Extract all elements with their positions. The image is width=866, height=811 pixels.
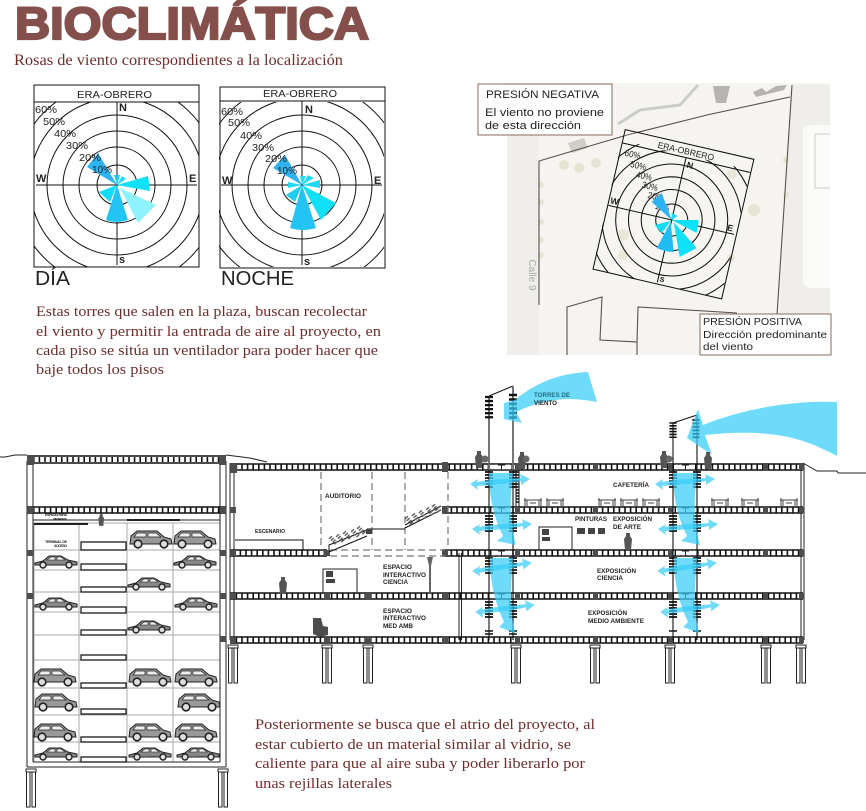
wind rose: noche: 60% <box>221 106 243 118</box>
section labels: CIENCIA <box>597 575 623 582</box>
wind rose: día: 60% <box>35 104 57 116</box>
wind rose: día: 30% <box>66 140 88 152</box>
callout: presión negativa: de esta dirección <box>485 120 581 132</box>
section labels: TORRES DE <box>534 392 571 399</box>
panel: site map: Calle 9 <box>526 259 537 291</box>
wind rose: día: 10% <box>92 164 112 176</box>
callout: presión negativa: El viento no proviene <box>485 107 604 119</box>
wind rose: día <box>34 84 200 268</box>
arrows: flujo descendente torre 2 <box>673 473 700 633</box>
wind rose: noche: 30% <box>252 142 274 154</box>
wind rose: noche: s <box>304 256 310 268</box>
section labels: MEDIO AMBIENTE <box>588 618 645 625</box>
section labels: EXPOSICIÓN <box>613 514 652 523</box>
callout: presión negativa <box>478 84 612 135</box>
callout: presión positiva: PRESIÓN POSITIVA <box>703 315 802 328</box>
section: main building structure <box>228 462 806 683</box>
wind rose: día: 20% <box>79 152 101 164</box>
section: ground line <box>0 455 866 473</box>
section labels: EXPOSICIÓN <box>597 566 636 575</box>
text block: atrio <box>255 717 595 792</box>
section: parking building: TERMINAL DE <box>45 540 68 544</box>
text block: atrio: estar cubierto de un material similar al vidrio, se <box>255 737 571 753</box>
wind rose: día: 50% <box>43 116 65 128</box>
callout: presión positiva <box>700 314 831 355</box>
wind rose: día: s <box>119 254 125 266</box>
section labels: MED AMB <box>383 623 413 630</box>
wind rose: noche: W <box>222 175 233 187</box>
ramp platforms <box>81 542 126 762</box>
people and vegetation <box>279 451 712 637</box>
wind rose: noche: 20% <box>265 153 287 165</box>
wind rose: noche: E <box>374 175 381 187</box>
wind rose: orientada sobre el plano: 40% <box>635 169 653 183</box>
section labels: PINTURAS <box>575 516 608 523</box>
text block: atrio: unas rejillas laterales <box>255 776 392 792</box>
section labels: VIENTO <box>534 400 557 407</box>
wind rose: noche: 40% <box>240 130 262 142</box>
wind rose: noche: ERA-OBRERO <box>263 88 337 100</box>
section: parking building <box>26 455 228 807</box>
auditorium <box>235 472 448 556</box>
wind rose: día: 40% <box>54 128 76 140</box>
wind rose: orientada sobre el plano: ERA-OBRERO <box>657 140 715 163</box>
exhibits <box>323 527 605 593</box>
text block: torres de viento <box>36 304 382 378</box>
wind rose: orientada sobre el plano: s <box>659 273 666 284</box>
wind rose: día: N <box>119 102 127 114</box>
subtitle: Rosas de viento correspondientes a la localización <box>14 52 343 69</box>
wind rose: noche: 50% <box>228 117 250 129</box>
wind rose: noche: N <box>305 104 313 116</box>
section labels: EXPOSICIÓN <box>588 608 627 617</box>
wind rose: día: E <box>189 173 196 185</box>
callout: presión positiva: Dirección predominante <box>703 329 827 341</box>
section labels: INTERACTIVO <box>383 615 426 622</box>
section labels <box>255 392 652 630</box>
section: parking building: SISTEMAS <box>53 518 68 522</box>
wind rose: orientada sobre el plano <box>592 129 754 300</box>
wind rose: noche: 10% <box>277 165 297 177</box>
panel: site map <box>507 83 830 355</box>
wind rose: noche <box>219 86 386 268</box>
section: parking building: ACCESO <box>54 544 67 548</box>
text block: torres de viento: cada piso se sitúa un ventilador para poder hacer que <box>36 343 378 359</box>
section labels: ESPACIO <box>383 608 412 615</box>
wind rose: orientada sobre el plano: 10% <box>654 201 670 214</box>
wind rose: orientada sobre el plano: 50% <box>629 159 647 172</box>
wind rose: orientada sobre el plano: 60% <box>624 148 642 161</box>
wind rose: día: W <box>36 173 47 185</box>
callout: presión negativa: PRESIÓN NEGATIVA <box>486 88 600 101</box>
label: noche: NOCHE <box>221 268 294 290</box>
arrow: viento entrante torre 2 <box>687 402 837 456</box>
section: parking building: ESPACIO PARA <box>45 513 67 517</box>
wind rose: orientada sobre el plano: N <box>686 160 694 171</box>
arrow: viento entrante torre 1 <box>504 372 597 423</box>
section labels: DE ARTE <box>613 524 642 531</box>
cars <box>130 531 172 548</box>
callout: presión positiva: del viento <box>703 341 753 353</box>
text block: torres de viento: el viento y permitir la entrada de aire al proyecto, en <box>36 324 382 340</box>
section labels: INTERACTIVO <box>383 572 426 579</box>
towers and louvers <box>485 386 701 640</box>
text block: torres de viento: baje todos los pisos <box>36 362 164 378</box>
atrium openings in the slabs <box>492 465 695 598</box>
arrows: flujo descendente torre 1 <box>489 473 516 633</box>
section labels: ESCENARIO <box>255 529 285 535</box>
section labels: CIENCIA <box>383 579 408 586</box>
wind rose: orientada sobre el plano: E <box>726 222 734 234</box>
text block: atrio: Posteriormente se busca que el atrio del proyecto, al <box>255 717 595 733</box>
wind rose: orientada sobre el plano: 20% <box>647 190 665 203</box>
section labels: AUDITORIO <box>325 493 361 500</box>
section labels: CAFETERÍA <box>613 480 649 489</box>
wind rose: orientada sobre el plano: W <box>609 195 620 207</box>
label: día: DÍA <box>35 267 71 290</box>
text block: atrio: caliente para que al aire suba y poder liberarlo por <box>255 756 585 772</box>
wind rose: día: ERA-OBRERO <box>77 89 152 101</box>
text block: torres de viento: Estas torres que salen en la plaza, buscan recolectar <box>36 304 367 320</box>
cafeteria tables <box>524 498 798 507</box>
arrows: flujo lateral <box>470 474 720 618</box>
section labels: ESPACIO <box>383 564 412 571</box>
wind rose: orientada sobre el plano: 30% <box>641 180 659 193</box>
